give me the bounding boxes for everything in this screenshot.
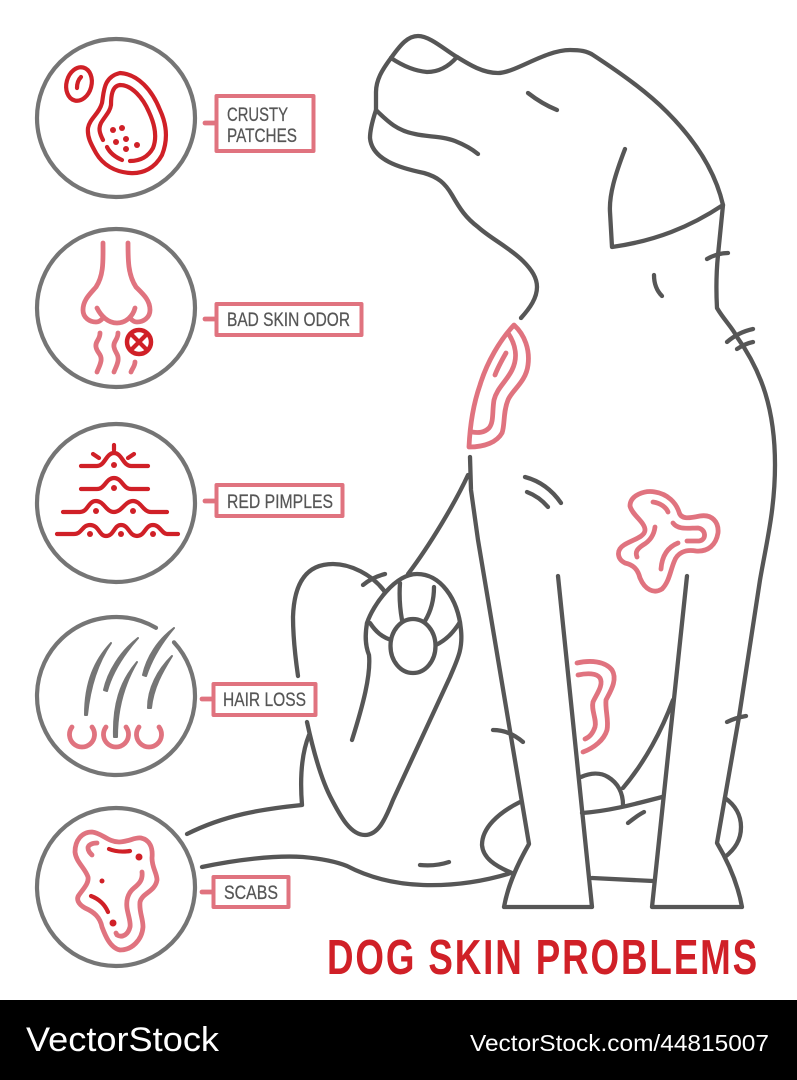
- dog head, back and right leg outline: [391, 36, 775, 907]
- panel: red pimples: [37, 424, 342, 582]
- label: BAD SKIN ODOR: [227, 309, 350, 331]
- circle: [37, 39, 195, 197]
- mouth line: [376, 110, 478, 154]
- leg lesion: [577, 661, 614, 752]
- neck lesion: [469, 325, 528, 447]
- panel: crusty patches: [37, 39, 314, 197]
- icon: scab: [75, 832, 157, 950]
- circle with gap: [4, 584, 228, 808]
- footer bar: [0, 1000, 797, 1080]
- label: CRUSTY: [227, 104, 288, 126]
- label: [202, 684, 316, 715]
- dog muzzle and throat outline: [370, 58, 537, 318]
- raised paw outline: [307, 574, 461, 835]
- chest line to paw: [408, 475, 468, 574]
- paw toes: [363, 574, 460, 645]
- icon: odor waves: [96, 333, 135, 372]
- label: HAIR LOSS: [223, 689, 306, 711]
- icon: crossed circle: [127, 330, 151, 354]
- circle: [37, 424, 195, 582]
- circle: [37, 229, 195, 387]
- paw pad: [390, 619, 436, 673]
- watermark logo: VectorStock: [26, 1021, 220, 1059]
- label: [205, 304, 362, 335]
- dog illustration: [187, 36, 775, 907]
- tail and hind leg line: [187, 735, 309, 834]
- icon: crusty patch: [63, 64, 166, 173]
- icon: hair strands: [85, 628, 174, 737]
- nose line: [391, 57, 457, 72]
- ear: [610, 149, 723, 247]
- label: PATCHES: [227, 125, 297, 147]
- title: DOG SKIN PROBLEMS: [327, 931, 759, 985]
- belly and hind foot: [581, 700, 673, 881]
- thigh line: [293, 564, 385, 676]
- watermark url: VectorStock.com/44815007: [470, 1030, 769, 1056]
- right side bump and tick: [725, 716, 746, 857]
- inner leg line: [352, 623, 369, 740]
- panel: bad skin odor: [37, 229, 362, 387]
- circle: [37, 808, 195, 966]
- back bump and details: [420, 730, 523, 873]
- icon: nose: [83, 243, 150, 323]
- label: SCABS: [224, 882, 278, 904]
- label: [202, 877, 288, 907]
- eye: [528, 93, 557, 110]
- panel: hair loss: [4, 584, 316, 808]
- panel: scabs: [37, 808, 288, 966]
- neck and chest ticks: [525, 253, 753, 507]
- body lesion: [618, 492, 718, 591]
- icon: pimples: [57, 445, 178, 537]
- icon: follicles: [70, 727, 162, 747]
- label: [205, 96, 314, 151]
- front left leg: [470, 457, 592, 907]
- label: RED PIMPLES: [227, 491, 333, 513]
- lower hind line: [202, 857, 511, 885]
- label: [205, 485, 342, 516]
